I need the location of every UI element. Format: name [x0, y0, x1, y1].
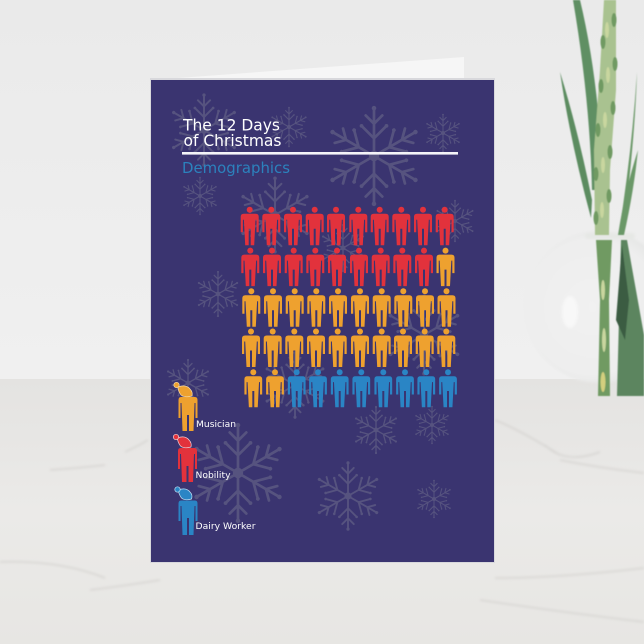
legend item: nobility: Nobility: [196, 471, 231, 481]
snowflake pattern: [164, 93, 476, 531]
lower leaves in the vase: [617, 240, 644, 396]
title: [182, 116, 282, 150]
plant: [560, 0, 644, 396]
subtitle: Demographics: [182, 159, 290, 177]
legend item: musician: [174, 382, 236, 431]
row 5: musicians and dairy workers: [244, 369, 457, 407]
wheat stalk: [594, 0, 616, 235]
marble table: [0, 379, 644, 644]
row 1: nobility: [241, 207, 454, 245]
legend item: nobility: [173, 434, 231, 482]
card back flap: [151, 57, 464, 80]
tall back leaf: [573, 0, 598, 190]
thin left leaf: [560, 72, 592, 218]
row 4: musicians: [242, 328, 455, 367]
row 3: musicians: [242, 288, 456, 327]
title: The 12 Days: [182, 116, 280, 134]
legend item: musician: Musician: [196, 420, 236, 430]
legend item: dairy worker: Dairy Worker: [196, 522, 256, 532]
title: of Christmas: [184, 131, 282, 150]
glass vase: [524, 231, 644, 383]
legend item: dairy worker: [175, 487, 256, 535]
card panel: [150, 78, 495, 563]
pictogram chart: [241, 207, 457, 407]
wall background: [0, 0, 644, 379]
legend: [173, 382, 256, 535]
title rule: [182, 152, 458, 155]
thin right leaves: [619, 72, 637, 232]
row 2: nobility and one musician: [241, 248, 454, 286]
